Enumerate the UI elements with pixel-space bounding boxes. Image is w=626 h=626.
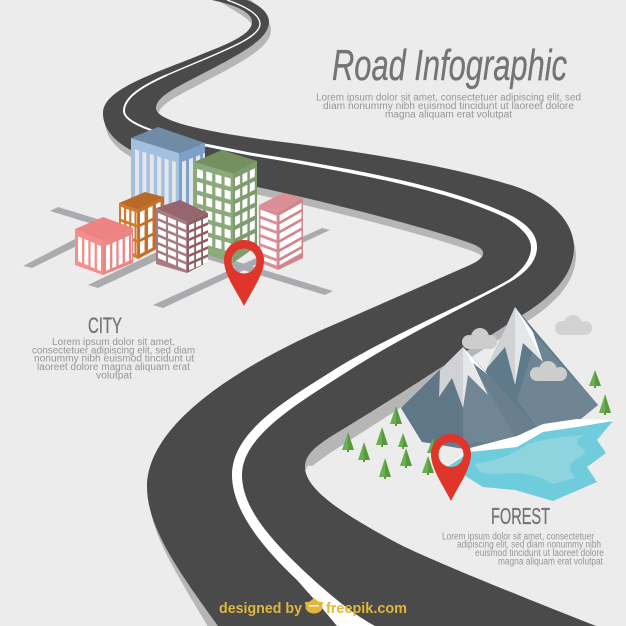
forest text block: adipiscing elit, sed diam nonummy nibh (457, 540, 601, 551)
city streets (23, 207, 333, 308)
tree (379, 458, 391, 479)
city text block: nonummy nibh euismod tincidunt ut (34, 354, 194, 365)
clouds (462, 315, 592, 381)
city heading: CITY (88, 313, 122, 338)
tree (599, 394, 611, 415)
trees (342, 370, 611, 479)
cloud (530, 361, 567, 381)
tree (400, 448, 412, 468)
building: pink tower (259, 193, 303, 270)
footer credit (219, 598, 407, 617)
city text block: volutpat (96, 370, 132, 381)
header text block: Lorem ipsum dolor sit amet, consectetuer adipiscing elit, sed (316, 92, 581, 104)
tree (342, 432, 354, 452)
city map pin (224, 240, 264, 306)
tree (390, 406, 402, 426)
back mountain (480, 307, 598, 428)
footer credit: freepik.com (326, 600, 407, 617)
tree (358, 442, 370, 462)
header text block: magna aliquam erat volutpat (385, 110, 512, 120)
building: coral block (75, 217, 133, 275)
tree (589, 370, 601, 388)
forest text block: magna aliquam erat volutpat (498, 556, 603, 567)
city buildings (75, 127, 303, 275)
road shadow (105, 0, 598, 626)
front mountain snow (439, 347, 488, 408)
forest text block (442, 531, 604, 567)
city text block: consectetuer adipiscing elit, sed diam (32, 345, 195, 356)
back mountain snow (487, 307, 543, 385)
forest heading: FOREST (491, 503, 550, 529)
road (103, 0, 596, 626)
header text block: diam nonummy nibh euismod tincidunt ut laoreet dolore (323, 101, 574, 112)
mountains (401, 307, 598, 450)
city text block: Lorem ipsum dolor sit amet, (52, 337, 175, 348)
road centre line (124, 0, 537, 626)
tree (427, 438, 439, 453)
cloud (555, 315, 592, 335)
tree (376, 427, 388, 447)
forest text block: Lorem ipsum dolor sit amet, consectetuer (442, 531, 595, 542)
footer credit: designed by (219, 600, 303, 617)
building: maroon block (156, 200, 208, 273)
city text block: laoreet dolore magna aliquam erat (37, 362, 190, 373)
front mountain (401, 347, 537, 450)
forest text block: euismod tincidunt ut laoreet dolore (475, 548, 604, 559)
cloud (462, 328, 497, 349)
lake (447, 421, 613, 501)
building: green tower (194, 150, 257, 263)
forest map pin (431, 434, 471, 501)
tree (398, 433, 408, 449)
tree (422, 456, 434, 475)
city text block (32, 337, 195, 381)
icon: freepik logo (305, 598, 323, 614)
building: blue tower (131, 127, 205, 218)
header text block (316, 92, 581, 120)
shoreline (447, 419, 613, 467)
building: orange block (119, 192, 164, 259)
